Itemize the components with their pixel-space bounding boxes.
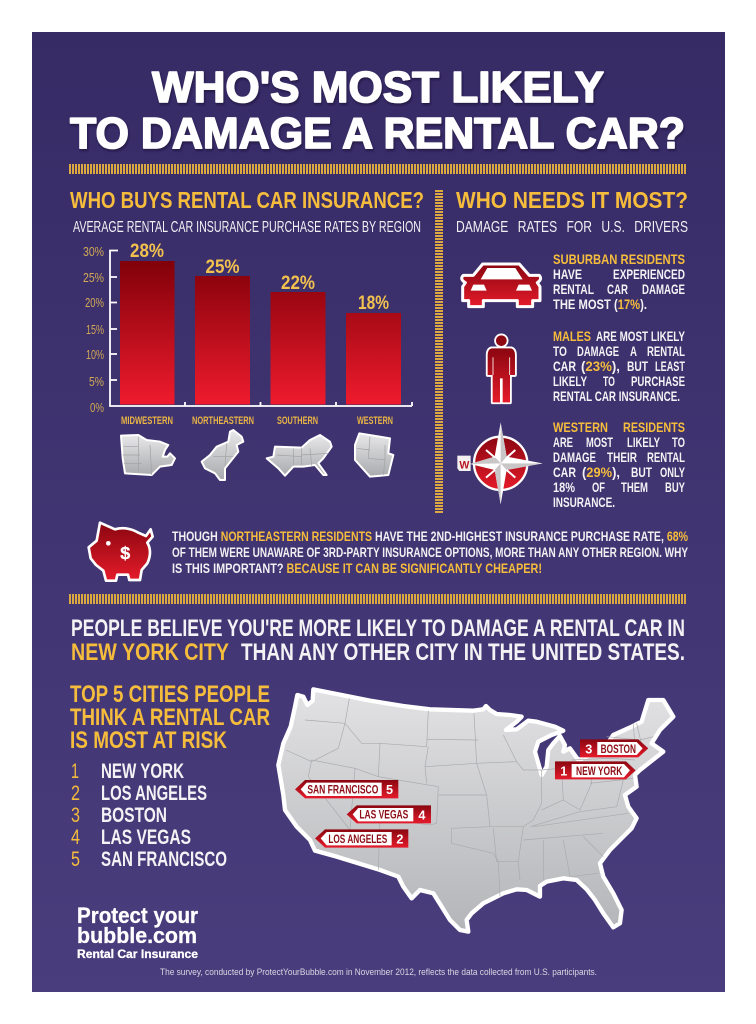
text: suburban residents: THE MOST (17%). bbox=[553, 296, 647, 312]
label: san francisco bbox=[295, 780, 398, 798]
bar value labels: 25% bbox=[206, 257, 240, 278]
text: western residents: CAR bbox=[553, 464, 576, 480]
label: los angeles: 2 bbox=[396, 832, 403, 846]
bar chart: purchase rates by region bbox=[83, 241, 412, 480]
label: boston: BOSTON bbox=[601, 743, 636, 756]
region labels: WESTERN bbox=[357, 415, 393, 427]
logo: protect your bubble bbox=[77, 903, 198, 961]
title: WHO'S MOST LIKELY bbox=[152, 63, 604, 112]
text: western residents: ARE bbox=[553, 434, 573, 450]
y axis labels: 15% bbox=[86, 322, 104, 337]
text: western residents: THEIR bbox=[607, 449, 637, 465]
bar value labels: 18% bbox=[358, 293, 389, 314]
text: western residents: BUY bbox=[665, 479, 685, 495]
text: males: CAR bbox=[553, 358, 576, 374]
bar value labels bbox=[130, 241, 389, 314]
text: western residents: RESIDENTS bbox=[623, 419, 685, 435]
text: males bbox=[553, 328, 685, 404]
bar value labels: 28% bbox=[130, 241, 164, 262]
text: males: LEAST bbox=[655, 358, 685, 374]
label: san francisco: SAN FRANCISCO bbox=[307, 783, 378, 796]
text: western residents: TO bbox=[672, 434, 685, 450]
region labels: NORTHEASTERN bbox=[192, 415, 254, 427]
ranked city list: 2 bbox=[71, 782, 80, 805]
heading: who buys rental car insurance: WHO BUYS RENTAL CAR INSURANCE? bbox=[70, 187, 424, 213]
label: las vegas: 4 bbox=[418, 808, 425, 822]
text: western residents: (29%), bbox=[582, 464, 620, 480]
icon: compass: W bbox=[459, 459, 470, 471]
map: midwest and northeast bbox=[121, 430, 243, 480]
label: las vegas: LAS VEGAS bbox=[359, 809, 408, 822]
region labels bbox=[121, 415, 393, 427]
y axis labels: 20% bbox=[85, 295, 104, 310]
text: males: ARE MOST LIKELY bbox=[596, 328, 685, 344]
footer note: The survey, conducted by ProtectYourBubble.com in November 2012, reflects the data collected from U.S. participants. bbox=[160, 967, 597, 978]
text: males: RENTAL CAR INSURANCE. bbox=[553, 388, 680, 404]
label: new york: 1 bbox=[560, 764, 567, 778]
text: belief statement bbox=[71, 615, 685, 666]
label: boston bbox=[580, 739, 648, 757]
icon: piggy bank: $ bbox=[120, 543, 131, 563]
ranked city list: LOS ANGELES bbox=[101, 782, 207, 805]
ranked city list: 3 bbox=[71, 804, 80, 827]
heading: top 5 cities bbox=[70, 681, 270, 754]
text: western residents: THEM bbox=[621, 479, 648, 495]
label: los angeles bbox=[315, 829, 408, 848]
ranked city list bbox=[71, 760, 227, 871]
ranked city list: SAN FRANCISCO bbox=[101, 848, 227, 871]
text: western residents: MOST bbox=[586, 434, 613, 450]
y axis labels: 0% bbox=[90, 400, 104, 415]
text: northeastern callout bbox=[172, 529, 688, 576]
y axis labels: 30% bbox=[83, 244, 104, 259]
heading: top 5 cities: TOP 5 CITIES PEOPLE bbox=[70, 681, 270, 708]
ranked city list: BOSTON bbox=[101, 804, 167, 827]
heading: top 5 cities: IS MOST AT RISK bbox=[70, 727, 228, 754]
text: males: PURCHASE bbox=[631, 373, 685, 389]
heading: who buys rental car insurance bbox=[70, 187, 424, 236]
heading: who needs it most: DAMAGE RATES FOR U.S. DRIVERS bbox=[456, 219, 688, 236]
map: south and west bbox=[267, 433, 393, 477]
text: males: BUT bbox=[627, 358, 648, 374]
text: belief statement: NEW YORK CITY bbox=[71, 639, 229, 666]
text: males: (23%), bbox=[581, 358, 620, 374]
ranked city list: LAS VEGAS bbox=[101, 826, 191, 849]
map outline bbox=[278, 689, 673, 932]
us map with city labels bbox=[278, 689, 673, 932]
text: males: A bbox=[630, 343, 637, 359]
heading: top 5 cities: THINK A RENTAL CAR bbox=[70, 704, 270, 731]
logo: protect your bubble: bubble.com bbox=[77, 923, 197, 948]
text: males: DAMAGE bbox=[577, 343, 619, 359]
text: western residents: BUT bbox=[631, 464, 652, 480]
text: northeastern callout: IS THIS IMPORTANT? BECAUSE IT CAN BE SIGNIFICANTLY CHEAPER! bbox=[172, 561, 542, 576]
heading: who needs it most: WHO NEEDS IT MOST? bbox=[456, 187, 688, 213]
text: western residents: WESTERN bbox=[553, 419, 608, 435]
y axis labels: 5% bbox=[89, 374, 104, 389]
ranked city list: NEW YORK bbox=[101, 760, 184, 783]
label: san francisco: 5 bbox=[386, 783, 393, 797]
text: western residents: 18% bbox=[553, 479, 575, 495]
logo: protect your bubble: Rental Car Insurance bbox=[77, 949, 198, 961]
text: western residents: DAMAGE bbox=[553, 449, 596, 465]
text: males: TO bbox=[553, 343, 567, 359]
logo: protect your bubble: Protect your bbox=[77, 903, 198, 928]
region labels: MIDWESTERN bbox=[121, 415, 173, 427]
text: suburban residents: EXPERIENCED bbox=[613, 266, 685, 282]
ranked city list: 5 bbox=[71, 848, 80, 871]
y axis labels: 25% bbox=[83, 270, 104, 285]
text: western residents: LIKELY bbox=[627, 434, 660, 450]
text: suburban residents: RENTAL bbox=[553, 281, 594, 297]
text: suburban residents: DAMAGE bbox=[642, 281, 685, 297]
icon: compass bbox=[457, 422, 543, 504]
label: los angeles: LOS ANGELES bbox=[328, 833, 387, 846]
title bbox=[70, 63, 685, 158]
text: western residents: INSURANCE. bbox=[553, 494, 615, 510]
label: new york: NEW YORK bbox=[576, 765, 623, 778]
title: TO DAMAGE A RENTAL CAR? bbox=[70, 109, 685, 158]
y axis labels: 10% bbox=[86, 347, 104, 362]
icon: piggy bank bbox=[89, 523, 153, 581]
text: suburban residents: SUBURBAN RESIDENTS bbox=[553, 251, 685, 267]
y axis labels bbox=[83, 244, 104, 415]
text: males: LIKELY bbox=[553, 373, 587, 389]
bar value labels: 22% bbox=[281, 273, 315, 294]
axes bbox=[110, 250, 412, 406]
heading: who needs it most bbox=[456, 187, 688, 236]
ranked city list: 1 bbox=[71, 760, 79, 783]
label: boston: 3 bbox=[585, 742, 592, 756]
text: males: TO bbox=[603, 373, 615, 389]
region labels: SOUTHERN bbox=[277, 415, 318, 427]
text: males: RENTAL bbox=[647, 343, 685, 359]
label: las vegas bbox=[347, 805, 431, 823]
text: suburban residents bbox=[553, 251, 685, 312]
text: western residents: RENTAL bbox=[647, 449, 685, 465]
text: western residents bbox=[553, 419, 685, 510]
heading: who buys rental car insurance: AVERAGE RENTAL CAR INSURANCE PURCHASE RATES BY REGION bbox=[73, 219, 421, 236]
bars bbox=[120, 261, 401, 404]
text: western residents: OF bbox=[592, 479, 605, 495]
icon: car bbox=[462, 264, 541, 307]
text: suburban residents: CAR bbox=[607, 281, 628, 297]
text: western residents: ONLY bbox=[660, 464, 685, 480]
ranked city list: 4 bbox=[71, 826, 80, 849]
text: males: MALES bbox=[553, 328, 591, 344]
text: northeastern callout: THOUGH NORTHEASTERN RESIDENTS HAVE THE 2ND-HIGHEST INSURANCE PURCHASE RATE, 68% bbox=[172, 529, 688, 544]
icon: person bbox=[488, 335, 515, 402]
state borders bbox=[286, 698, 653, 897]
label: new york bbox=[555, 761, 636, 779]
text: suburban residents: HAVE bbox=[553, 266, 582, 282]
